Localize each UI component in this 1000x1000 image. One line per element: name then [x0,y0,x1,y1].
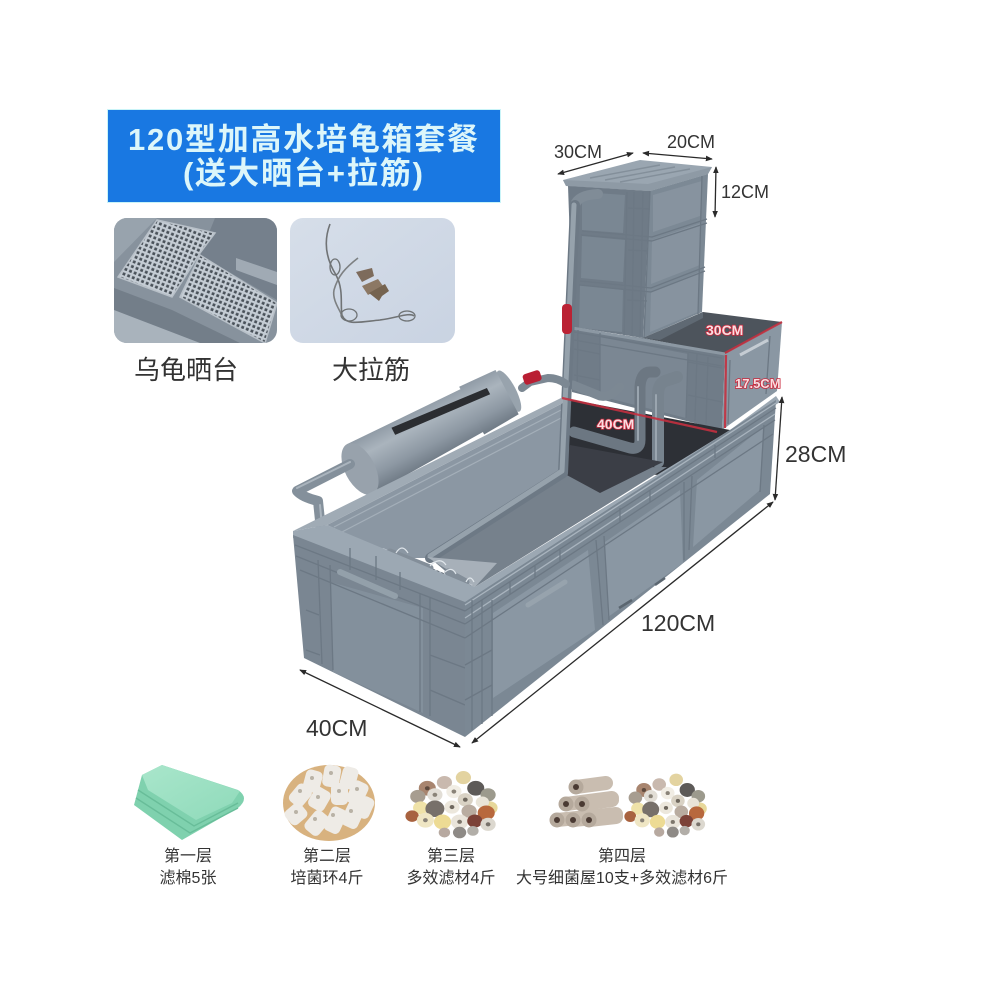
small tower filter boxes [563,160,712,338]
media: green filter foam [134,765,244,840]
main crate left face [293,535,465,737]
red valve on vertical pipe [562,304,572,334]
title banner: 120型加高水培龟箱套餐 [128,122,478,157]
back wall and floor of main tank [327,403,667,587]
label: layer 1: 第一层 [164,848,212,865]
vertical pipe and floor drain [430,194,598,558]
red dimension: box 40CM: 40CM [597,416,634,432]
label: layer 4: 大号细菌屋10支+多效滤材6斤 [516,869,728,887]
label: tension wires: 大拉筋 [332,355,410,385]
panel: tension wires photo [290,218,455,343]
red dimension: box 30CM [706,322,782,353]
dimension: tower 30CM [554,142,633,174]
dimension: tower 30CM: 30CM [554,142,602,162]
label: layer 4: 第四层 [598,848,646,865]
label: layer 2: 培菌环4斤 [291,869,363,887]
media: multi-effect filter material large [624,774,707,838]
dimension: tank width 40CM: 40CM [306,715,367,741]
red dimension: box 40CM [562,398,717,432]
dimension: tank width 40CM [300,670,460,747]
dimension: tank length 120CM: 120CM [641,610,715,636]
title banner: (送大晒台+拉筋) [183,156,423,191]
media: multi-effect filter material [405,771,498,838]
media: bacteria house bricks [550,780,616,828]
dimension: tank height 28CM [775,397,846,500]
label: layer 1: 滤棉5张 [160,869,216,887]
label: layer 2: 第二层 [303,848,351,865]
panel: turtle basking platform photo [114,218,277,343]
red dimension: box 30CM: 30CM [706,322,743,338]
main crate rim and mesh platform [293,396,780,604]
plumbing inside tank [573,372,677,462]
dimension: tower 20CM: 20CM [667,132,715,152]
title banner [107,109,501,203]
canister filter with valve [334,363,566,501]
red dimension: box 17.5CM: 17.5CM [735,376,781,391]
label: layer 3: 多效滤材4斤 [407,869,495,887]
media: ceramic rings on plate [283,764,376,841]
interior far wall [563,398,730,475]
main crate right face [465,400,776,737]
dimension: tower 12CM: 12CM [721,182,769,202]
back rim [293,397,563,531]
label: layer 3: 第三层 [427,848,475,865]
dimension: tank height 28CM: 28CM [785,441,846,467]
faces [568,186,650,338]
near and long rim [293,396,780,604]
dimension: tank length 120CM [472,502,773,743]
label: turtle basking platform: 乌龟晒台 [134,355,238,385]
return pipe from canister [297,462,350,540]
lid [563,160,712,191]
red dimension: box 17.5CM [725,355,781,428]
lower filter box with red dimension box [572,312,782,430]
dimension: tower 20CM [643,132,715,159]
dimension: tower 12CM [715,167,769,217]
